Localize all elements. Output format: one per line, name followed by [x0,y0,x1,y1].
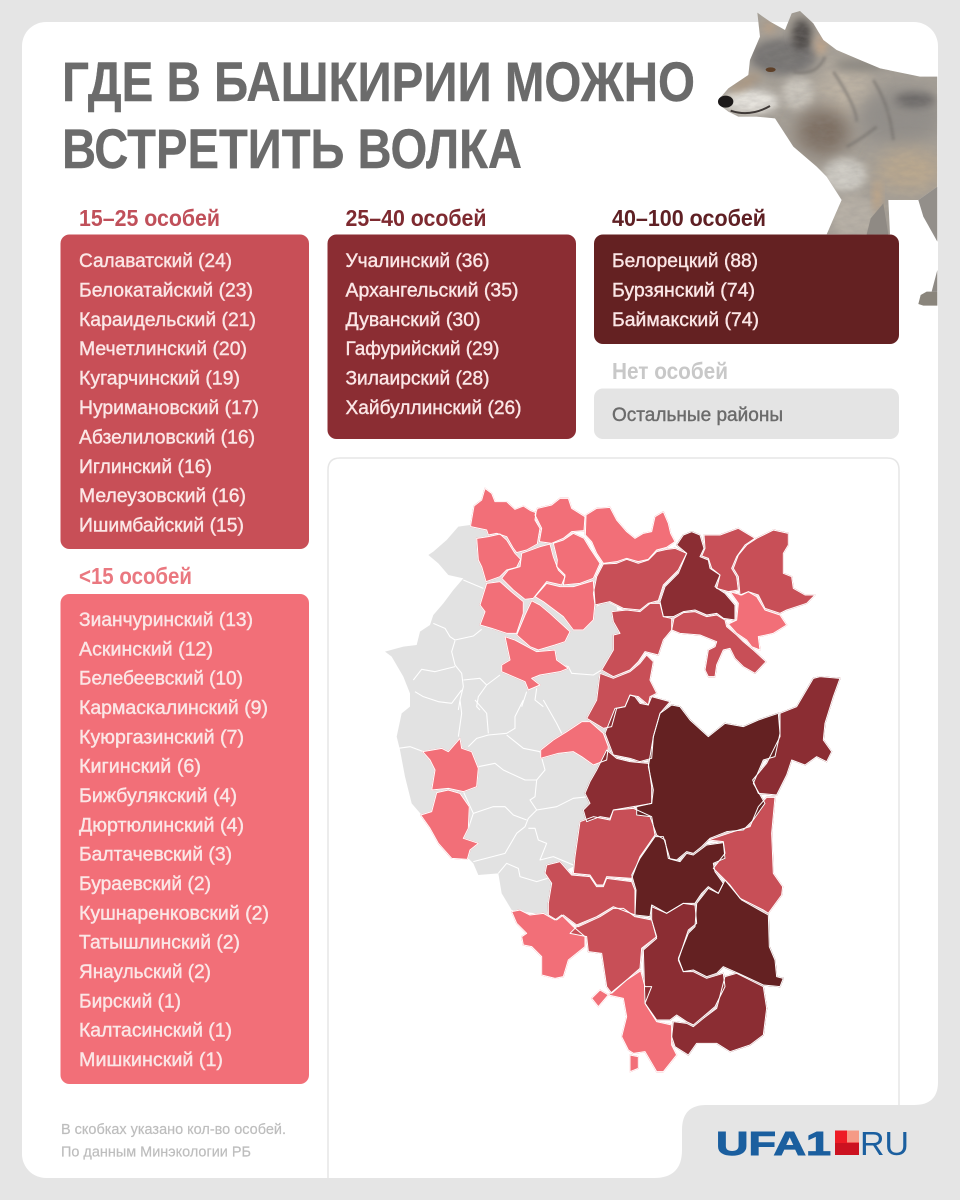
panel: <15 особей: Татышлинский (2) [79,933,240,954]
panel: <15 особей: Бижбулякский (4) [79,786,237,807]
districts 15–25 wolves [545,528,815,993]
panel: <15 особей: Кигинский (6) [79,757,201,778]
panel: 15–25 особей: Нуримановский (17) [79,398,259,419]
panel: <15 особей: Кармаскалинский (9) [79,698,268,719]
panel: 40–100 особей: Баймакский (74) [612,310,759,331]
title: ГДЕ В БАШКИРИИ МОЖНО [62,50,695,113]
panel: <15 особей: Аскинский (12) [79,639,213,660]
wolf illustration [710,7,943,306]
panel: 40–100 особей: Бурзянский (74) [612,280,755,301]
panel: <15 особей: Дюртюлинский (4) [79,815,244,836]
panel: 15–25 особей: Салаватский (24) [79,251,232,272]
panel: 15–25 особей: Мечетлинский (20) [79,339,247,360]
panel: <15 особей: <15 особей [79,563,192,589]
wolf paw [918,292,937,306]
panel: <15 особей: Зианчуринский (13) [79,610,253,631]
panel: 15–25 особей: Иглинский (16) [79,457,212,478]
panel: нет особей [594,358,899,439]
title: ВСТРЕТИТЬ ВОЛКА [62,117,522,180]
panel: <15 особей: Бирский (1) [79,991,181,1012]
footnote: По данным Минэкологии РБ [61,1144,251,1160]
districts with no wolves [385,520,623,915]
panel: 40–100 особей: 40–100 особей [612,205,766,231]
panel: 15–25 особей: Мелеузовский (16) [79,486,246,507]
panel: 15–25 особей: Ишимбайский (15) [79,516,244,537]
panel: <15 особей: Балтачевский (3) [79,845,232,866]
panel: 25–40 особей: Зилаирский (28) [346,369,490,390]
panel: <15 особей: Мишкинский (1) [79,1050,223,1071]
panel: 25–40 особей: Архангельский (35) [346,280,518,301]
panel: 25–40 особей: Дуванский (30) [346,310,480,331]
panel: нет особей: Остальные районы [612,405,783,426]
title [62,50,695,180]
panel: 40–100 особей: Белорецкий (88) [612,251,758,272]
logo tab [654,1060,960,1178]
panel: <15 особей: Янаульский (2) [79,962,211,983]
panel: 15–25 особей: 15–25 особей [79,205,220,231]
choropleth map of Bashkortostan [385,488,840,1072]
footnote: В скобках указано кол-во особей. [61,1122,286,1138]
panel: 25–40 особей: Гафурийский (29) [346,339,500,360]
panel: 25–40 особей: 25–40 особей [346,205,486,231]
panel: 25–40 особей [328,205,576,439]
districts under 15 wolves [421,488,787,1072]
panel: 25–40 особей: Хайбуллинский (26) [346,398,522,419]
wolf back leg [918,187,937,242]
panel: <15 особей: Кушнаренковский (2) [79,903,269,924]
panel: <15 особей: Белебеевский (10) [79,669,243,690]
logo: UFA1.RU: RU [860,1126,909,1163]
panel: <15 особей: Куюргазинский (7) [79,727,244,748]
district border lines [421,488,840,1072]
panel: 15–25 особей [60,205,309,549]
panel: 15–25 особей: Кугарчинский (19) [79,369,240,390]
panel: 25–40 особей: Учалинский (36) [346,251,490,272]
footnote [61,1122,286,1160]
panel: 15–25 особей: Караидельский (21) [79,310,256,331]
panel: нет особей: Нет особей [612,358,728,384]
districts 40–100 wolves [632,705,783,987]
panel: 15–25 особей: Абзелиловский (16) [79,427,255,448]
panel: <15 особей [60,563,309,1084]
map panel frame [328,458,899,1178]
panel: <15 особей: Калтасинский (1) [79,1021,232,1042]
districts 25–40 wolves [583,532,840,1055]
logo: UFA1.RU: UFA1 [716,1126,831,1163]
panel: 40–100 особей [594,205,899,344]
panel: <15 особей: Бураевский (2) [79,874,211,895]
logo: UFA1.RU [716,1126,909,1163]
wolf nose and eye [718,96,733,108]
panel: 15–25 особей: Белокатайский (23) [79,280,253,301]
